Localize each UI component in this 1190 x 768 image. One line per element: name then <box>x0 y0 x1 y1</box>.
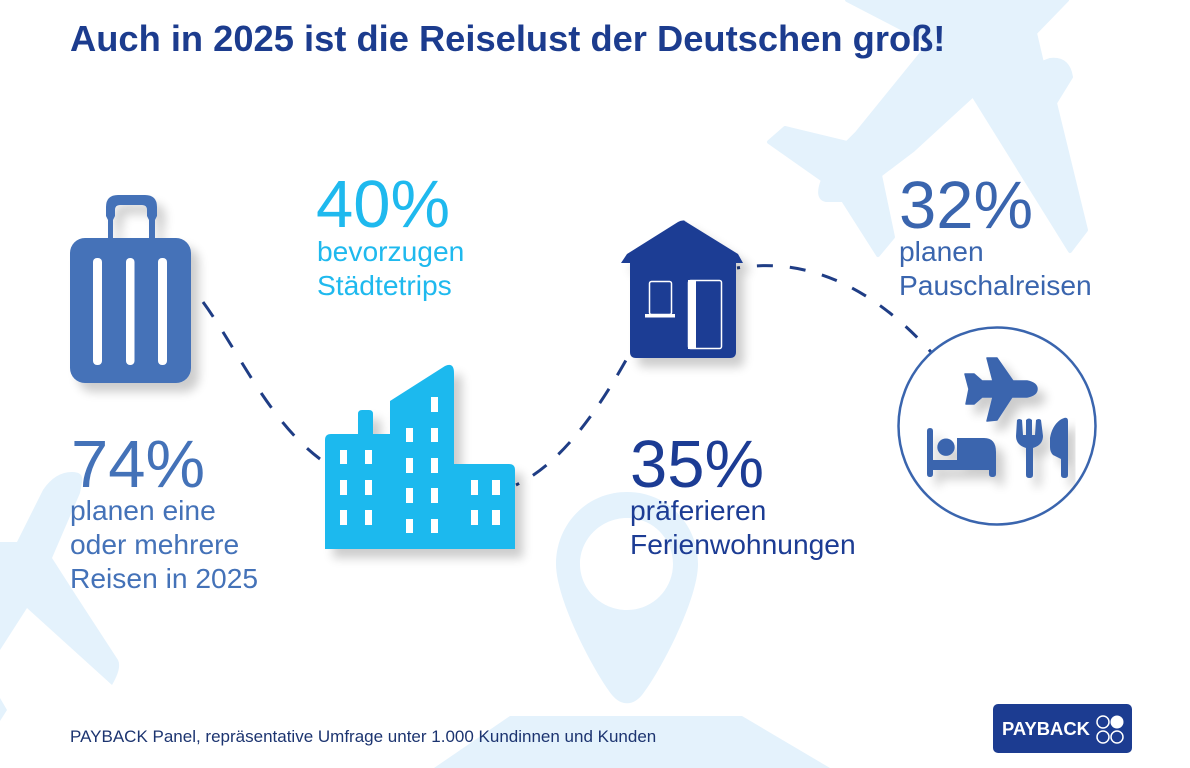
icon: package trip circle <box>898 328 1096 524</box>
icon: bed <box>927 428 996 477</box>
stat: 40 percent city trips: bevorzugen <box>317 235 464 267</box>
background icon: shape at bottom edge <box>434 716 830 768</box>
stat: 32 percent package trips: 32% <box>899 168 1033 243</box>
dashed connector: city to house <box>516 353 630 485</box>
stat: 74 percent plan trips: 74% <box>71 427 205 502</box>
stat: 40 percent city trips: 40% <box>316 167 450 242</box>
icon: fork <box>1016 418 1043 478</box>
stat: 35 percent holiday apartments <box>630 427 856 560</box>
stat: 35 percent holiday apartments: 35% <box>630 427 764 502</box>
stat: 32 percent package trips: planen <box>899 235 984 267</box>
icon: knife <box>1050 418 1068 478</box>
dashed connector: house to package trip <box>737 266 931 352</box>
stat: 35 percent holiday apartments: präferieren <box>630 494 766 526</box>
icon: suitcase <box>70 195 191 383</box>
background icon: large airplane top right <box>769 0 1086 255</box>
icon: airplane <box>965 358 1037 421</box>
footnote: source: PAYBACK Panel, repräsentative Umfrage unter 1.000 Kundinnen und Kunden <box>70 727 656 746</box>
stat: 74 percent plan trips: planen eine <box>70 494 216 526</box>
stat: 32 percent package trips <box>899 168 1092 301</box>
stat: 74 percent plan trips <box>70 427 258 594</box>
stat: 40 percent city trips: Städtetrips <box>317 269 452 301</box>
stat: 40 percent city trips <box>316 167 464 301</box>
icon: holiday house <box>621 220 743 358</box>
background icon: map pin <box>556 492 698 703</box>
stat: 35 percent holiday apartments: Ferienwohnungen <box>630 528 856 560</box>
icon: city buildings <box>325 365 515 549</box>
stat: 74 percent plan trips: Reisen in 2025 <box>70 562 258 594</box>
logo: PAYBACK <box>993 704 1132 753</box>
stat: 74 percent plan trips: oder mehrere <box>70 528 239 560</box>
dashed connector: suitcase to city <box>203 302 320 459</box>
stat: 32 percent package trips: Pauschalreisen <box>899 269 1092 301</box>
title: Auch in 2025 ist die Reiselust der Deutschen groß! <box>70 18 945 59</box>
background icon: airplane bottom left <box>0 472 119 721</box>
logo: PAYBACK: PAYBACK <box>1002 718 1091 739</box>
